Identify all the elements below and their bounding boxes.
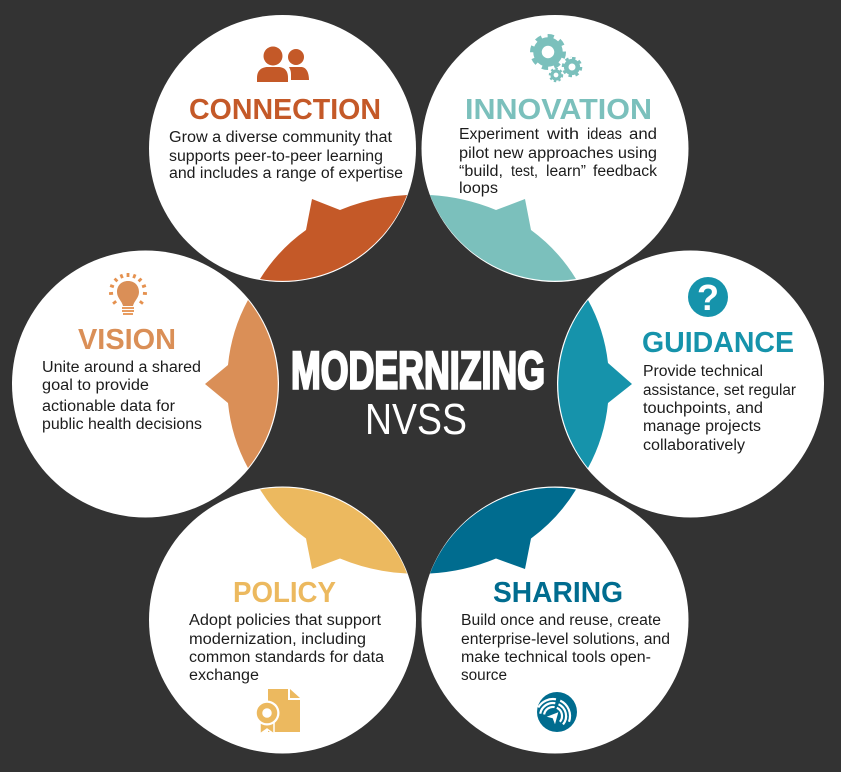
panel: sharing: [422, 486, 688, 754]
icon: broadcast arrow: [537, 692, 577, 732]
text: guidance description: touchpoints, and: [643, 400, 763, 417]
panel: policy: [149, 486, 416, 754]
title: [291, 342, 545, 444]
text: innovation description: [459, 126, 657, 197]
text: vision description: [42, 359, 202, 433]
text: innovation description: loops: [459, 180, 498, 197]
title line: modernizing: MODERNIZING: [291, 342, 545, 400]
text: connection description: Grow a diverse community that: [169, 129, 393, 146]
icon: light bulb: [109, 273, 147, 314]
text: policy description: Adopt policies that support: [189, 612, 382, 629]
text: innovation description: ideas: [587, 126, 622, 143]
text: sharing description: [461, 612, 670, 684]
text: sharing description: make technical tools open-: [461, 649, 651, 666]
wedge: policy: [260, 488, 407, 574]
wedge: innovation: [430, 195, 576, 281]
text: guidance description: [643, 363, 796, 454]
text: connection description: [169, 129, 403, 182]
text: vision description: public health decisions: [42, 416, 202, 433]
heading: policy: POLICY: [233, 577, 336, 609]
text: innovation description: “build,: [459, 163, 503, 180]
heading: innovation: INNOVATION: [465, 94, 652, 126]
title line: nvss: NVSS: [365, 395, 467, 444]
text: policy description: [189, 612, 384, 684]
icon: people: [257, 46, 309, 82]
panel: guidance: [557, 250, 824, 518]
text: vision description: goal to provide: [42, 377, 149, 394]
text: guidance description: assistance, set regular: [643, 382, 796, 399]
text: innovation description: with: [546, 126, 579, 143]
icon: certificate document: [254, 689, 300, 734]
wedge: connection: [260, 195, 407, 281]
text: sharing description: enterprise-level solutions, and: [461, 631, 670, 648]
text: innovation description: test,: [511, 163, 538, 180]
text: innovation description: learn”: [546, 163, 586, 180]
text: policy description: exchange: [189, 667, 259, 684]
text: innovation description: pilot new approaches using: [459, 145, 657, 162]
text: guidance description: manage projects: [643, 418, 761, 435]
panel: innovation: [422, 15, 688, 282]
heading: guidance: GUIDANCE: [642, 327, 794, 359]
text: vision description: actionable data for: [42, 398, 175, 415]
icon: question mark: [688, 277, 728, 318]
wedge: sharing: [430, 488, 576, 574]
text: connection description: supports peer-to-peer learning: [169, 148, 383, 165]
text: vision description: Unite around a shared: [42, 359, 201, 376]
panel: vision: [12, 250, 279, 518]
text: sharing description: Build once and reuse, create: [461, 612, 661, 629]
text: policy description: modernization, including: [189, 631, 366, 648]
text: policy description: common standards for data: [189, 649, 384, 666]
text: innovation description: feedback: [593, 163, 657, 180]
text: sharing description: source: [461, 667, 507, 684]
icon: question mark: ?: [697, 277, 719, 318]
heading: sharing: SHARING: [493, 577, 623, 609]
heading: connection: CONNECTION: [189, 94, 381, 126]
text: guidance description: Provide technical: [643, 363, 763, 380]
icon: gears: [532, 36, 581, 81]
text: guidance description: collaboratively: [643, 437, 745, 454]
wedge: guidance: [558, 300, 632, 468]
text: innovation description: Experiment: [459, 126, 540, 143]
text: innovation description: and: [629, 126, 657, 143]
wedge: vision: [205, 300, 278, 468]
text: connection description: and includes a range of expertise: [169, 165, 403, 182]
heading: vision: VISION: [78, 324, 176, 356]
panel: connection: [149, 15, 416, 282]
